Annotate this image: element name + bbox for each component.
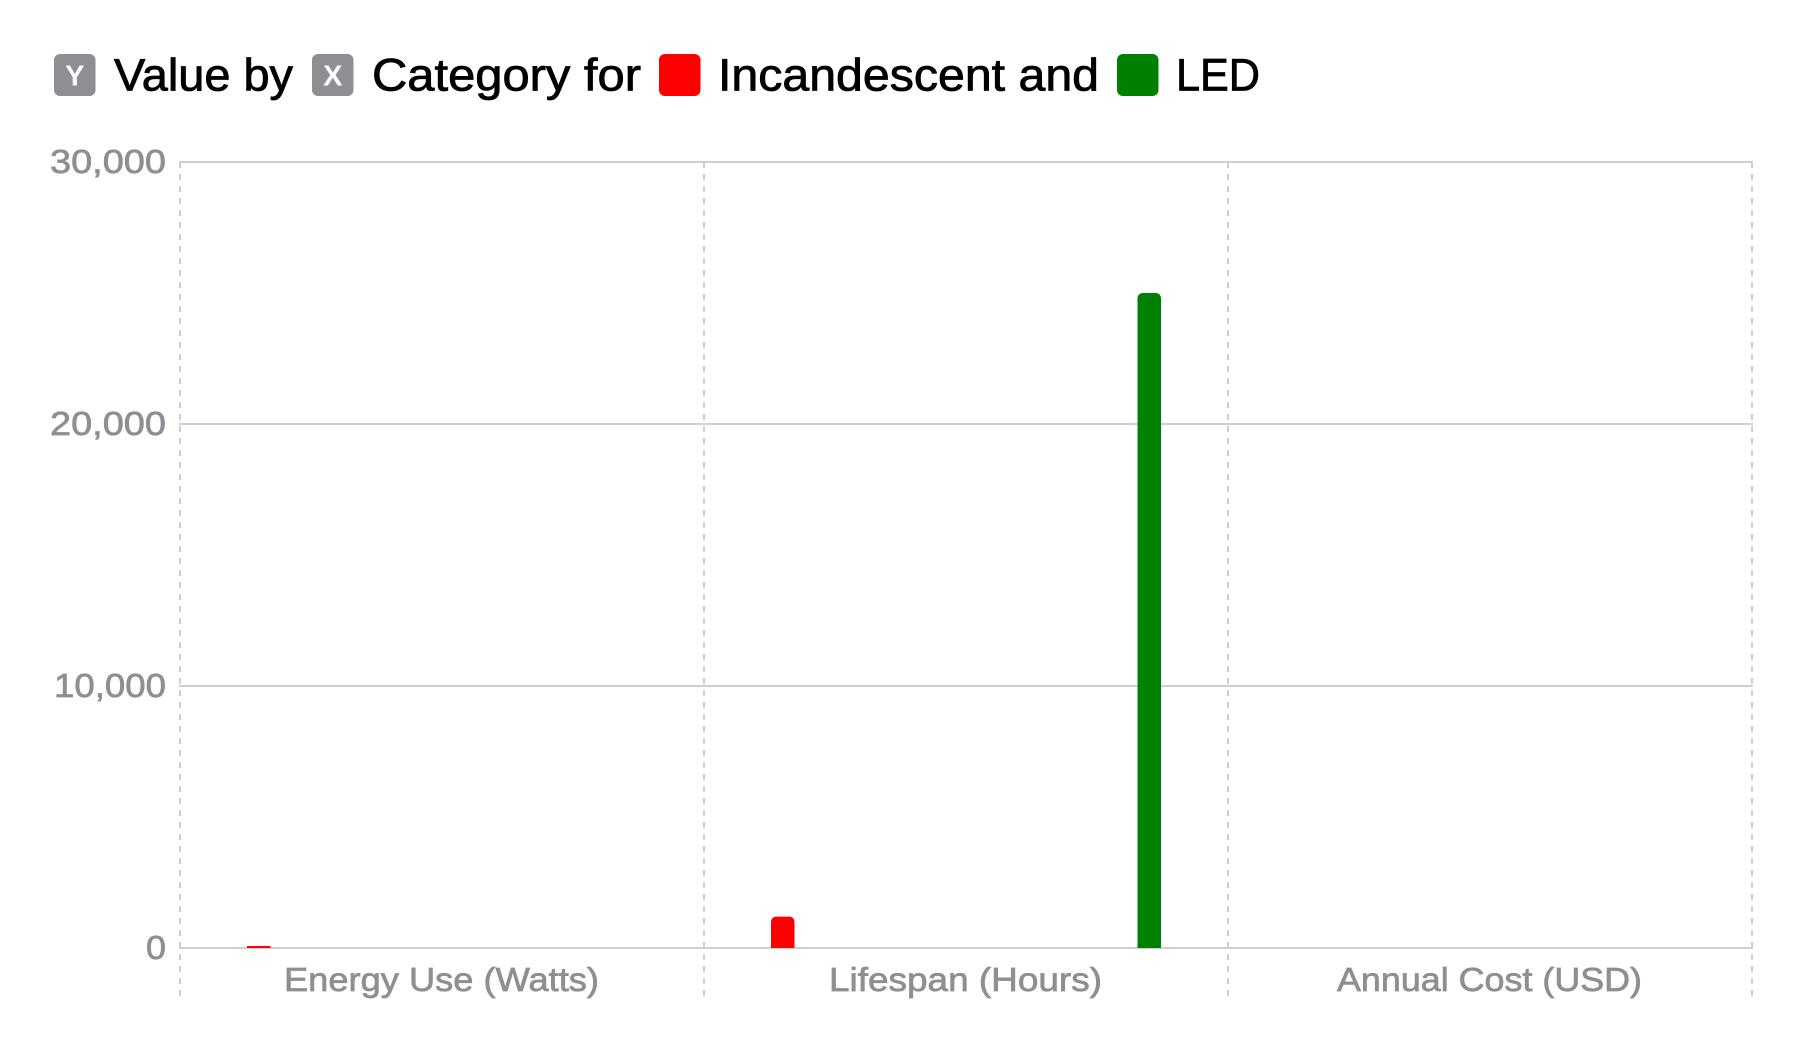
legend text: Value by: Value by xyxy=(114,50,294,100)
legend swatch: LED xyxy=(1117,54,1158,96)
icon: Y axis badge: Y xyxy=(65,60,84,92)
x axis labels: Lifespan (Hours) xyxy=(829,962,1102,999)
legend swatch: Incandescent xyxy=(659,54,700,96)
x axis labels: Energy Use (Watts) xyxy=(284,962,599,999)
bars xyxy=(247,293,1161,948)
legend text: LED: LED xyxy=(1176,50,1260,100)
x axis labels xyxy=(284,962,1642,999)
y axis labels: 20,000 xyxy=(50,406,166,443)
icon: X axis badge xyxy=(312,54,354,96)
bar: LED lifespan xyxy=(1138,293,1161,948)
horizontal grid lines xyxy=(179,162,1753,948)
legend title xyxy=(54,50,1260,100)
legend text: Category for: Category for xyxy=(372,50,641,100)
icon: X axis badge: X xyxy=(323,60,343,92)
y axis labels: 10,000 xyxy=(54,668,166,705)
legend text: Incandescent and: Incandescent and xyxy=(718,50,1099,100)
vertical dashed grid lines xyxy=(180,162,1752,997)
icon: Y axis badge xyxy=(54,54,96,96)
y axis labels: 30,000 xyxy=(50,144,166,181)
y axis labels xyxy=(50,144,166,967)
bar: Incandescent energy use xyxy=(247,946,270,948)
y axis labels: 0 xyxy=(146,930,166,967)
x axis labels: Annual Cost (USD) xyxy=(1337,962,1642,999)
bar: Incandescent lifespan xyxy=(771,917,794,948)
